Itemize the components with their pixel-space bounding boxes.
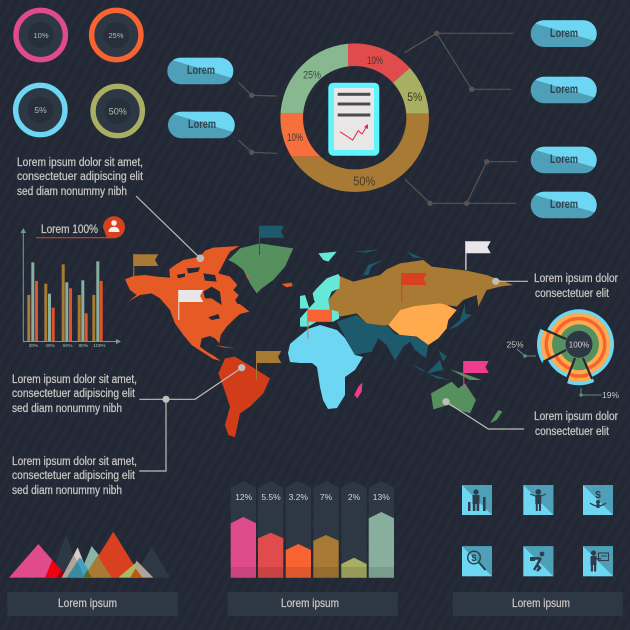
pill: right 2: Lorem — [550, 84, 578, 96]
map leader lines — [136, 196, 528, 471]
house-shaped bar chart: 7% — [320, 492, 333, 502]
bar chart: 100% — [93, 343, 106, 349]
house-shaped bar chart: 12% — [235, 492, 253, 502]
text block: top left: consectetuer adipiscing elit — [17, 171, 144, 183]
pill: right 2 — [530, 76, 597, 104]
flag: brown Alaska — [133, 254, 158, 283]
text block: lower left: sed diam nonummy nibh — [12, 485, 122, 497]
caption bar: bars — [228, 592, 398, 616]
text block: right upper — [534, 273, 618, 300]
pill: right 4 — [530, 191, 597, 219]
icon: stressed man — [523, 485, 553, 515]
bar chart: 60% — [63, 343, 73, 349]
Eurasia — [300, 249, 513, 423]
icon: magnifier dollar: $ — [471, 553, 477, 563]
radial chart: 100% — [569, 340, 589, 350]
icon: dollar on rope — [583, 485, 613, 515]
flag: pink Oceania — [463, 361, 489, 390]
bar chart — [20, 228, 121, 349]
house-shaped bar chart — [231, 481, 394, 578]
text block: top left — [17, 157, 144, 198]
ring: 10% pink: 10% — [33, 31, 49, 40]
icon: dollar on rope: $ — [595, 490, 601, 501]
Africa — [288, 325, 363, 409]
ring: 50% olive: 50% — [109, 106, 127, 116]
donut chart: 10% — [287, 132, 303, 144]
ring: 10% pink — [16, 10, 65, 60]
house-shaped bar chart: 2% — [348, 492, 361, 502]
text block: top left: Lorem ipsum dolor sit amet, — [17, 157, 143, 169]
text block: right lower: Lorem ipsum dolor — [534, 411, 618, 423]
flag: white North America — [178, 290, 203, 320]
flag: white Siberia — [465, 241, 491, 270]
text block: lower left — [12, 456, 137, 497]
text block: right upper: Lorem ipsum dolor — [534, 273, 618, 285]
bar chart: 40% — [45, 343, 56, 349]
caption bar: triangles: Lorem ipsum — [58, 596, 117, 610]
North America — [125, 246, 249, 361]
icon: man with bars — [462, 485, 492, 515]
text block: right lower: consectetuer elit — [535, 426, 610, 438]
pill: left top — [167, 57, 234, 85]
donut chart: 10% — [367, 55, 383, 67]
text block: right upper: consectetuer elit — [535, 288, 610, 300]
text block: middle left: Lorem ipsum dolor sit amet, — [12, 374, 137, 386]
bar chart: 20% — [29, 343, 39, 349]
pill: right 3: Lorem — [550, 154, 578, 166]
pill: left top: Lorem — [187, 65, 215, 77]
flag: teal Greenland — [259, 226, 284, 255]
flag: red Russia — [401, 273, 427, 302]
icon: document with chart — [328, 83, 379, 156]
text block: lower left: consectetuer adipiscing elit — [12, 470, 136, 482]
house-shaped bar chart: 3.2% — [289, 492, 308, 502]
radial chart: 25% — [506, 340, 524, 350]
flag: orange Europe — [307, 310, 332, 339]
pill: right 1: Lorem — [550, 28, 578, 40]
caption bar: bars: Lorem ipsum — [281, 596, 339, 610]
icon: man with board — [583, 546, 613, 576]
ring: 50% olive — [93, 86, 142, 136]
icon: running man — [523, 546, 553, 576]
South America — [218, 357, 270, 437]
text block: lower left: Lorem ipsum dolor sit amet, — [12, 456, 137, 468]
donut chart: 25% — [303, 70, 321, 82]
flag: brown South America — [256, 351, 281, 380]
text block: middle left: consectetuer adipiscing elit — [12, 388, 136, 400]
radial chart — [506, 309, 619, 398]
triangles chart — [9, 532, 170, 578]
pill: left bottom: Lorem — [188, 119, 216, 131]
Greenland and Iceland — [228, 243, 293, 293]
pill: right 4: Lorem — [550, 199, 578, 211]
text block: middle left: sed diam nonummy nibh — [12, 403, 122, 415]
radial chart: 19% — [602, 390, 619, 400]
donut chart — [280, 43, 429, 192]
caption bar: triangles — [7, 592, 178, 616]
ring: 5% blue: 5% — [34, 105, 47, 115]
bar chart: 80% — [78, 343, 89, 349]
ring: 25% orange — [92, 10, 141, 60]
text block: top left: sed diam nonummy nibh — [17, 186, 127, 198]
pill: right 1 — [530, 20, 597, 48]
text block: right lower — [534, 411, 618, 438]
donut chart: 5% — [407, 92, 422, 104]
house-shaped bar chart: 13% — [373, 492, 390, 502]
chart header with user icon: Lorem 100% — [41, 222, 98, 236]
ring: 25% orange: 25% — [108, 31, 124, 40]
donut chart: 50% — [353, 174, 375, 188]
world map — [125, 243, 513, 437]
icon: magnifier dollar — [462, 546, 492, 576]
pill: right 3 — [530, 146, 597, 174]
ring: 5% blue — [16, 85, 65, 135]
connector lines around donut — [238, 31, 518, 206]
text block: middle left — [12, 374, 137, 415]
house-shaped bar chart: 5.5% — [261, 492, 281, 502]
caption bar: icons: Lorem ipsum — [512, 596, 570, 610]
pill: left bottom — [168, 111, 235, 139]
caption bar: icons — [453, 592, 623, 616]
chart header with user icon — [36, 216, 125, 238]
